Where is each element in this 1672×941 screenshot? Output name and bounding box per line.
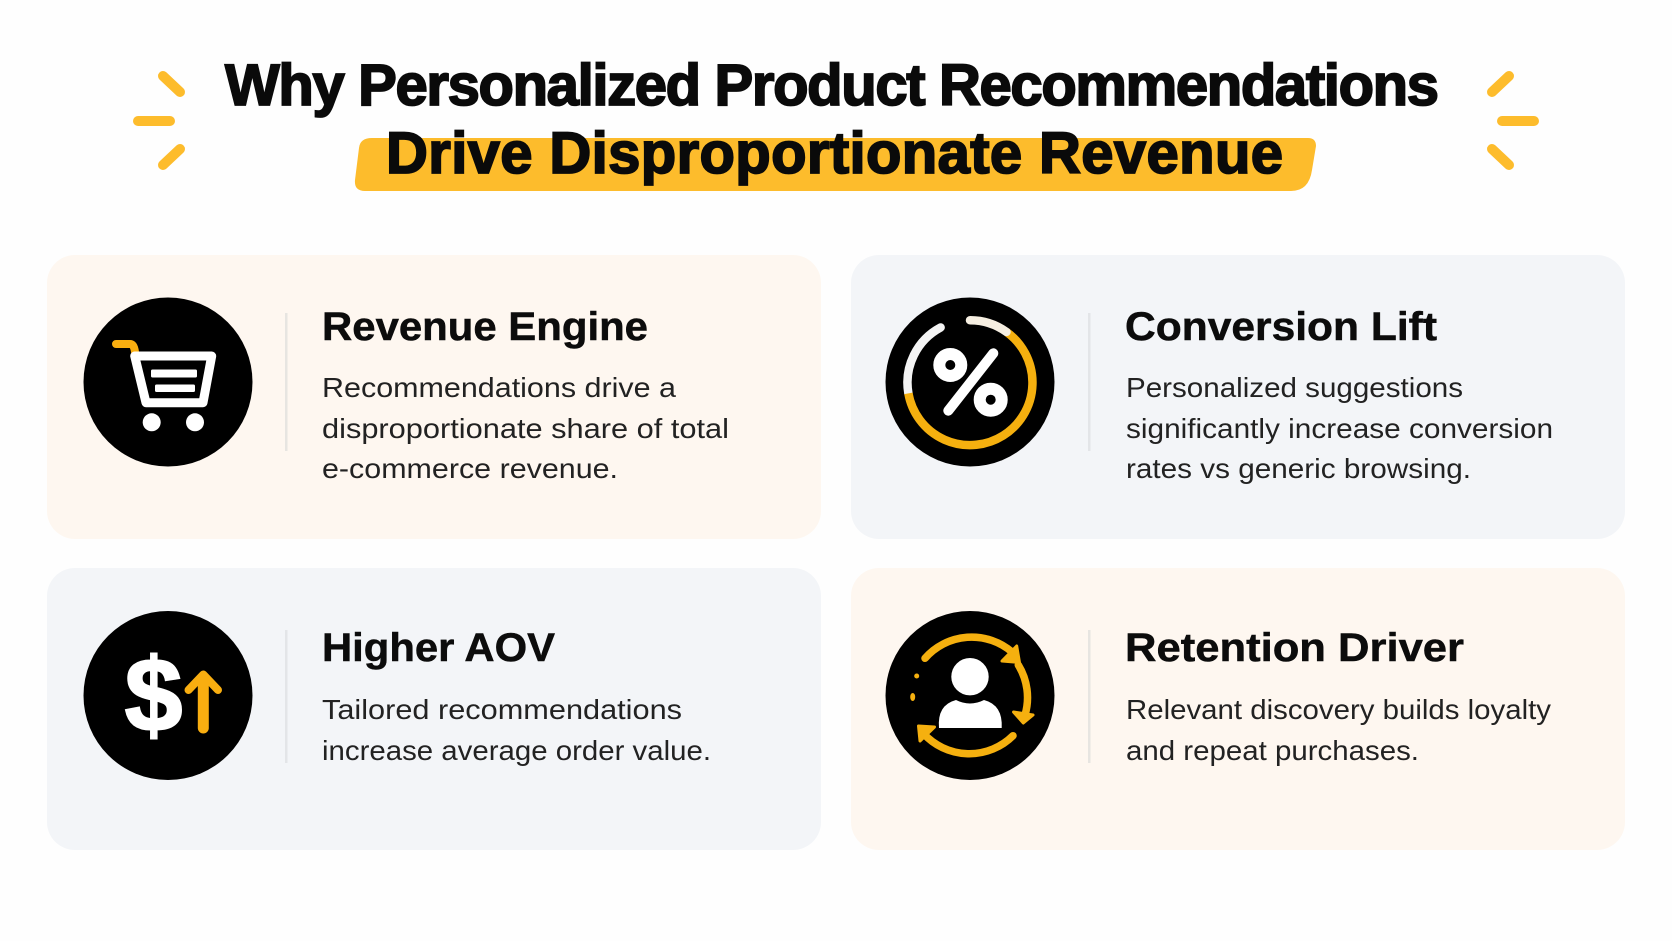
heading: Retention Driver xyxy=(1125,626,1464,670)
panel: higher AOV xyxy=(47,568,821,850)
body text: rates vs generic browsing. xyxy=(1126,453,1471,484)
heading: Higher AOV xyxy=(322,626,555,670)
icon: dollar with up arrow: $ xyxy=(125,638,182,754)
body text xyxy=(322,372,729,484)
body text: e-commerce revenue. xyxy=(322,453,618,484)
title line 1: Why Personalized Product Recommendations xyxy=(225,53,1439,118)
body text: Tailored recommendations xyxy=(322,694,682,725)
decorative burst left xyxy=(138,76,180,165)
body text xyxy=(1126,694,1551,766)
panel: conversion lift xyxy=(851,255,1625,539)
body text: disproportionate share of total xyxy=(322,413,729,444)
icon: percent ring xyxy=(886,298,1054,466)
body text: increase average order value. xyxy=(322,735,711,766)
title highlight bar xyxy=(355,138,1316,191)
icon: shopping cart xyxy=(84,298,252,466)
divider xyxy=(1088,313,1090,451)
divider xyxy=(1088,630,1090,763)
body text: Recommendations drive a xyxy=(322,372,677,403)
body text xyxy=(322,694,711,766)
title xyxy=(225,53,1439,191)
decorative burst right xyxy=(1492,76,1534,165)
divider xyxy=(285,313,288,451)
body text: Personalized suggestions xyxy=(1126,372,1463,403)
icon: dollar with up arrow xyxy=(84,611,252,780)
title line 2: Drive Disproportionate Revenue xyxy=(386,121,1283,186)
heading: Conversion Lift xyxy=(1125,305,1437,349)
panel: revenue engine xyxy=(47,255,821,539)
divider xyxy=(285,630,288,763)
body text: significantly increase conversion xyxy=(1126,413,1553,444)
icon: person with cycle arrows xyxy=(886,611,1054,780)
heading: Revenue Engine xyxy=(322,305,648,349)
body text xyxy=(1126,372,1553,484)
body text: and repeat purchases. xyxy=(1126,735,1419,766)
body text: Relevant discovery builds loyalty xyxy=(1126,694,1551,725)
panel: retention driver xyxy=(851,568,1625,850)
